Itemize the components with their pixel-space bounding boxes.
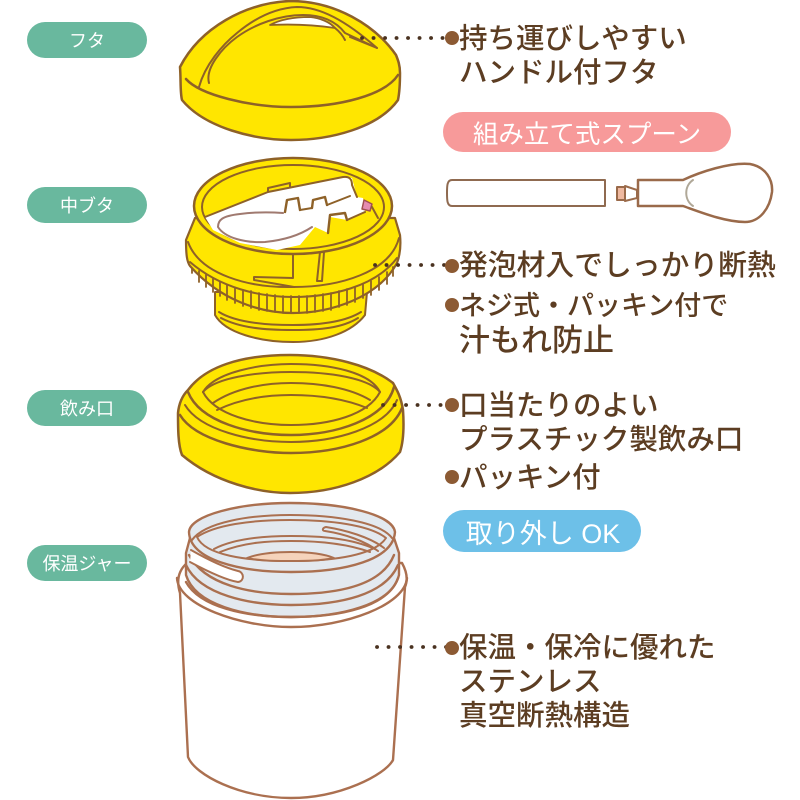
- label: lid: [27, 22, 147, 58]
- label: inner lid: [27, 187, 147, 223]
- label: inner lid: 中ブタ: [60, 196, 114, 216]
- note: carrying handle: 持ち運びしやすい: [459, 23, 687, 55]
- note: leak prevention: 汁もれ防止: [459, 323, 614, 358]
- bullet: [445, 641, 459, 655]
- leader lines: [362, 38, 446, 647]
- label: drinking spout: 飲み口: [60, 399, 114, 419]
- note: gasket: パッキン付: [459, 462, 601, 494]
- lid with handle: [180, 1, 400, 140]
- label: drinking spout: [27, 390, 147, 426]
- note: leak prevention: [459, 291, 728, 358]
- note: insulation: 発泡材入でしっかり断熱: [459, 250, 776, 282]
- badge: assembled spoon: [443, 112, 731, 152]
- drinking spout: [178, 355, 404, 493]
- note: vacuum insulation: 真空断熱構造: [459, 700, 630, 732]
- label: lid: フタ: [69, 31, 105, 51]
- spoon head: [617, 164, 772, 222]
- bullet: [445, 298, 459, 312]
- label: insulated jar: [27, 545, 147, 581]
- inner lid: [186, 158, 400, 342]
- note: plastic spout: 口当たりのよい: [459, 390, 659, 422]
- label: insulated jar: 保温ジャー: [42, 554, 132, 574]
- note: vacuum insulation: 保温・保冷に優れた: [459, 632, 716, 664]
- bullet: [445, 259, 459, 273]
- note: leak prevention: ネジ式・パッキン付で: [459, 291, 728, 321]
- bullet: [445, 470, 459, 484]
- badge: removable: 取り外し OK: [466, 518, 620, 548]
- bullet: [445, 31, 459, 45]
- note: vacuum insulation: [459, 632, 716, 732]
- note: vacuum insulation: ステンレス: [459, 666, 602, 698]
- bullet: [445, 398, 459, 412]
- badge: removable: [443, 510, 641, 552]
- note: carrying handle: [459, 23, 687, 89]
- note: carrying handle: ハンドル付フタ: [459, 57, 659, 89]
- jar: [177, 503, 407, 798]
- badge: assembled spoon: 組み立て式スプーン: [473, 120, 701, 148]
- spoon handle: [447, 180, 605, 206]
- note: plastic spout: プラスチック製飲み口: [459, 424, 743, 456]
- note: plastic spout: [459, 390, 743, 456]
